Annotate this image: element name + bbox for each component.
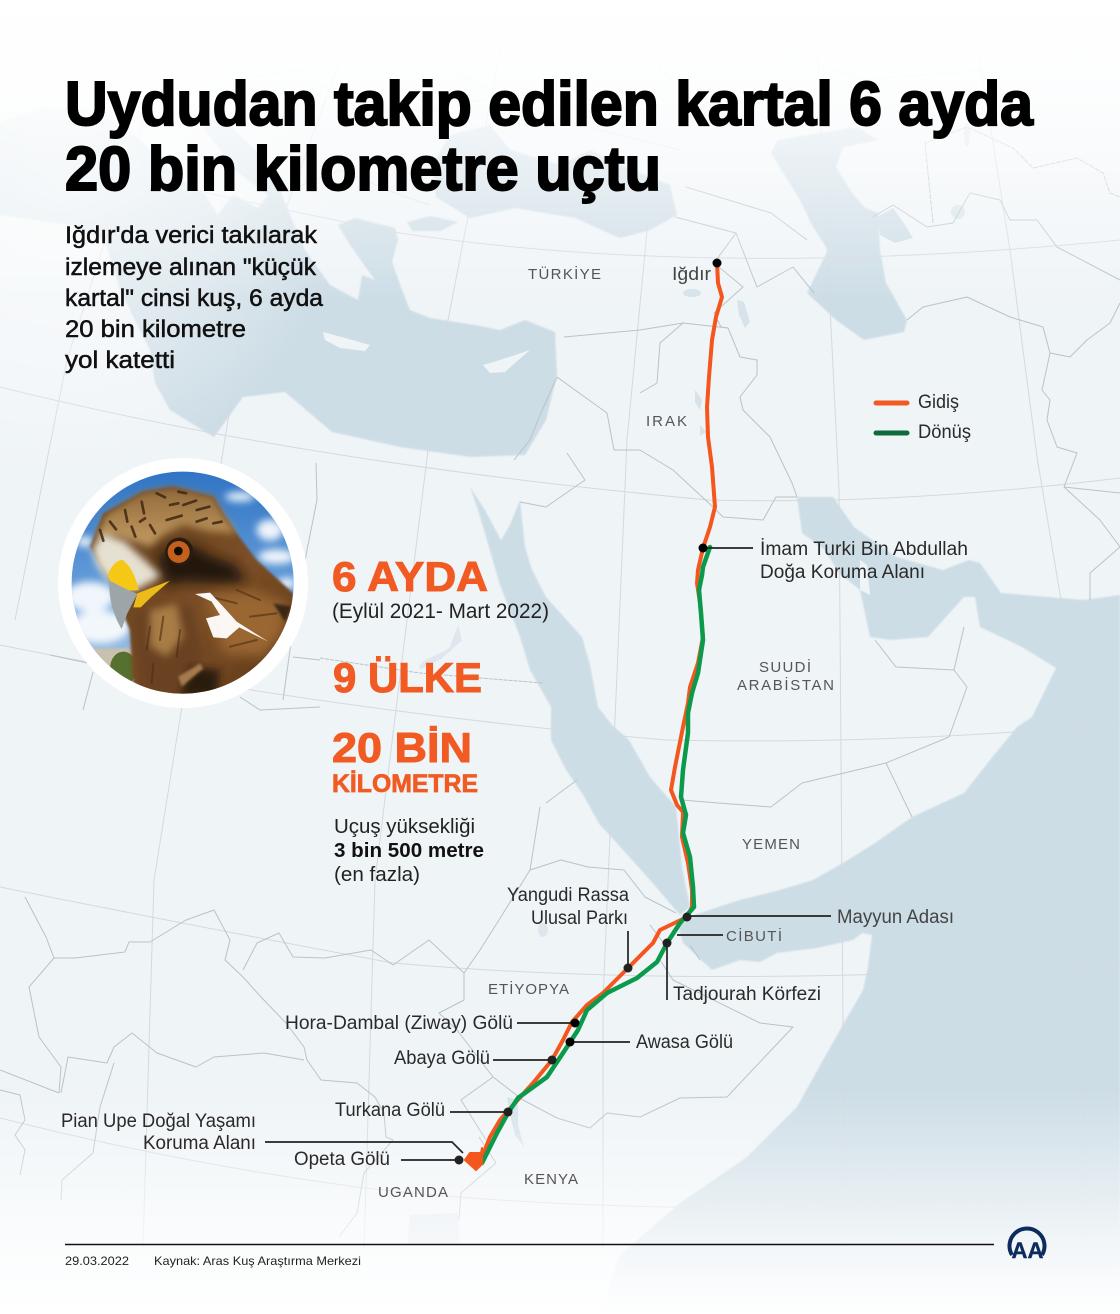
stat: flight altitude: (en fazla) [334, 864, 420, 886]
route: outbound (orange) [482, 263, 722, 1157]
sea: Caspian [771, 127, 907, 340]
sea: Persian Gulf and Arabian Sea [600, 497, 1120, 1314]
country labels: TÜRKİYE [528, 265, 601, 283]
sea: Black Sea [432, 125, 677, 238]
subtitle: yol katetti [65, 347, 175, 374]
subtitle: izlemeye alınan "küçük [65, 254, 317, 281]
place labels: Koruma Alanı [143, 1133, 256, 1154]
footer: 29.03.2022 [65, 1254, 129, 1268]
stat: 6 months [332, 553, 549, 623]
stat: flight altitude: Uçuş yüksekliği [334, 816, 475, 838]
country labels [378, 265, 834, 1201]
stat: flight altitude: 3 bin 500 metre [334, 840, 484, 862]
stat: 9 countries: 9 ÜLKE [333, 654, 482, 701]
footer [65, 1244, 994, 1268]
footer: Kaynak: Aras Kuş Araştırma Merkezi [154, 1254, 361, 1268]
logo: AA [1010, 1228, 1044, 1263]
country labels: ETİYOPYA [488, 980, 569, 998]
title: Uydudan takip edilen kartal 6 ayda [65, 70, 1033, 139]
lakes and islands [323, 123, 970, 1243]
subtitle: 20 bin kilometre [65, 316, 246, 343]
bottom fade [0, 1090, 1120, 1314]
subtitle: kartal" cinsi kuş, 6 ayda [65, 285, 324, 312]
stat: 20 thousand km [332, 724, 478, 798]
sea: Mediterranean [0, 100, 557, 457]
top fade [0, 0, 1120, 300]
place labels: Tadjourah Körfezi [673, 984, 821, 1005]
legend [876, 392, 971, 443]
subtitle: Iğdır'da verici takılarak [65, 222, 318, 249]
place labels: Ulusal Parkı [531, 908, 628, 929]
place labels: Mayyun Adası [837, 907, 954, 928]
sea: Red Sea [470, 487, 690, 915]
title: 20 bin kilometre uçtu [65, 135, 661, 204]
stat: 20 thousand km: 20 BİN [332, 724, 472, 771]
stat: 6 months: 6 AYDA [332, 553, 488, 600]
route: loop at Pian Upe [465, 1148, 482, 1170]
country labels: CİBUTİ [726, 927, 782, 945]
place labels: Iğdır [672, 264, 711, 284]
route: return (green) [482, 547, 710, 1163]
place labels: Opeta Gölü [294, 1149, 390, 1170]
place labels: Yangudi Rassa [507, 885, 629, 906]
place labels: Abaya Gölü [394, 1048, 490, 1069]
country labels: SUUDİ [759, 658, 811, 676]
place labels: Turkana Gölü [335, 1100, 445, 1121]
subtitle [65, 222, 324, 374]
sea: Marmara [407, 216, 458, 231]
country labels: ARABİSTAN [737, 676, 834, 694]
leader lines [265, 548, 831, 1160]
place labels [61, 264, 968, 1170]
title [65, 70, 1033, 204]
legend: Dönüş [918, 422, 971, 443]
place labels: İmam Turki Bin Abdullah [760, 539, 968, 560]
country labels: YEMEN [742, 836, 800, 853]
left fade [0, 0, 340, 470]
legend: Gidiş [918, 392, 959, 413]
place labels: Awasa Gölü [636, 1032, 733, 1053]
route stop dots [454, 258, 722, 1164]
place labels: Pian Upe Doğal Yaşamı [61, 1111, 256, 1132]
stat: flight altitude [334, 816, 484, 886]
country labels: KENYA [524, 1171, 578, 1188]
eagle photo [58, 458, 308, 717]
country labels: IRAK [646, 413, 687, 430]
country labels: UGANDA [378, 1184, 448, 1201]
stat: 20 thousand km: KİLOMETRE [332, 770, 478, 798]
logo: AA: AA [1012, 1238, 1044, 1263]
place labels: Hora-Dambal (Ziway) Gölü [285, 1013, 513, 1034]
stat: 6 months: (Eylül 2021- Mart 2022) [332, 600, 549, 623]
place labels: Doğa Koruma Alanı [760, 562, 925, 583]
